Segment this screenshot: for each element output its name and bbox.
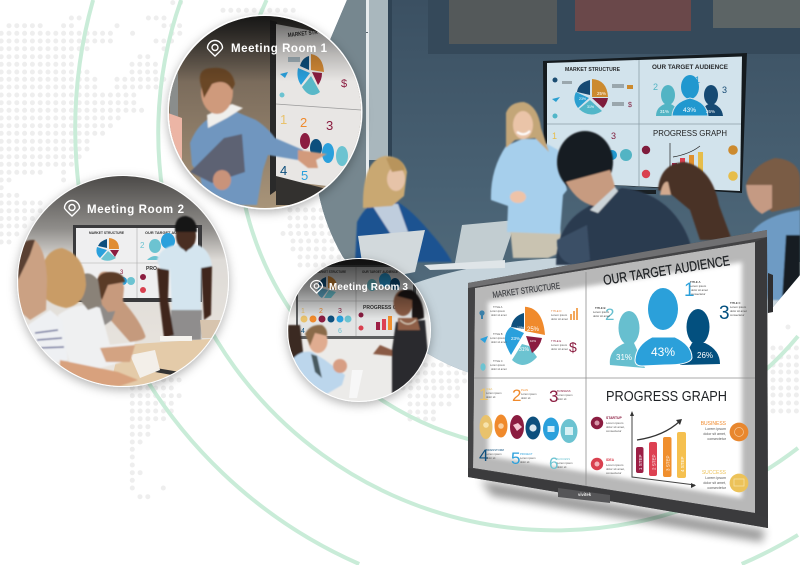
pie labels right: dolor sit amet [551,317,568,321]
pie labels left: dolor sit amet [491,340,507,344]
audience labels: dolor sit amet [691,288,708,292]
step text: SUCCESS [557,457,570,461]
display bezel [468,230,768,528]
pie labels left: dolor sit amet [491,367,507,371]
person center 43% [635,288,692,366]
pie chart [505,307,545,365]
label: meeting room 1 [208,41,328,56]
seated man with tie [288,325,347,395]
panel: target audience [593,252,747,368]
step numbers: 4 [479,446,488,465]
label: meeting room 2 [64,201,184,216]
step numbers: 5 [511,449,520,468]
step text: PROJECT [520,452,533,456]
audience labels: TITLE A [690,280,700,284]
bar chart with arrows [630,411,696,488]
startup and idea callouts: STARTUP [606,416,622,420]
pie labels right: TITLE D [551,309,561,313]
pictured screen: 1 [301,308,305,315]
pictured screen: MARKET STRUCTURE [89,231,124,235]
wall [318,0,800,375]
text: meeting room 1: Meeting Room 1 [231,43,328,55]
business and success callouts: BUSINESS [701,421,727,427]
wall display: progress graph [552,129,738,181]
audience labels: TITLE C [730,301,741,305]
circle 3 photo [288,259,430,401]
pictured screen: 6 [338,328,342,335]
pictured screen: 3 [120,270,124,276]
large foreground display [468,230,773,542]
startup and idea callouts [591,416,625,475]
person left 31%: 31% [616,353,632,362]
icon: location pin [310,280,322,293]
side port [768,273,773,313]
circle 3 frame [287,258,431,402]
business and success callouts: Lorem ipsum [705,427,726,431]
startup and idea callouts: IDEA [606,458,615,462]
circle 1 frame [168,14,362,210]
person right 26% [680,309,720,365]
pictured screen: 2 [319,308,323,315]
pie labels left: Lorem ipsum [490,309,505,313]
panel: six steps [479,385,578,473]
startup and idea callouts: dolor sit amet, [606,425,625,429]
bar chart with arrows: 1 STEP [638,454,643,470]
wall display: progress graph: PROGRESS GRAPH [653,129,727,138]
pie labels right [551,308,578,355]
wall display: progress graph: 1 [552,131,557,141]
display screen [473,242,755,513]
business and success callouts: dolor sit amet, [703,481,726,485]
pie chart: 31% [519,347,530,353]
circle: meeting room 2 [17,175,229,387]
label: meeting room 3 [310,280,409,293]
step text [486,387,573,469]
woman with brown hair from behind [658,162,732,240]
pie chart: 25% [527,327,540,333]
step text: dolor sit [557,465,567,469]
pictured screen: MARKET STR [288,30,319,39]
wall display: market structure: $ [628,102,632,109]
step numbers: 1 [479,385,488,404]
step numbers: 2 [512,386,521,405]
circle 2 frame [17,175,229,387]
icon: location pin [208,41,222,56]
step numbers [479,385,558,473]
pictured screen: PROGRESS G [363,305,397,311]
step text: Lorem ipsum [486,452,502,456]
bar chart with arrows: 2 STEP [652,454,656,470]
pie labels left: Lorem ipsum [490,336,505,340]
pictured screen: 4 [301,328,305,335]
wall display: target audience: 2 [653,82,658,92]
step text: Lorem ipsum [486,391,502,395]
pie labels right: dolor sit amet [551,347,568,351]
step numbers: 6 [549,454,558,473]
brand logo: vivitek [578,492,592,497]
startup and idea callouts: consectetur [606,471,622,475]
pie labels left: Lorem ipsum [490,363,505,367]
wall display: target audience: 31% [660,109,669,114]
business and success callouts: consectetur [707,437,727,441]
pictured screen: OUR TARGET AUDIENCE [362,270,399,274]
wall display: target audience: OUR TARGET AUDIENCE [652,64,729,71]
pictured screen: MARKET STRUCTURE [316,270,347,274]
pie labels right: Lorem ipsum [551,313,568,317]
laptop and desk items [349,370,363,398]
pictured screen: 2 [140,241,145,250]
person right 26%: 26% [697,351,713,360]
display shadow [480,480,765,542]
step text: Lorem ipsum [520,456,536,460]
wall display: target audience: 1 [695,75,700,85]
heading: our target audience: OUR TARGET AUDIENCE [602,252,731,288]
overhead windows [428,0,800,54]
person center 43%: 43% [651,345,675,359]
pie chart: 10% [530,339,536,343]
man pointing at screen [190,68,327,205]
step text: dolor sit [557,397,567,401]
pictured screen: 5 [301,168,308,183]
standing man [157,216,212,340]
step text: PLAN [521,388,528,392]
circle: meeting room 3 [287,258,431,402]
audience labels: consectetur [691,292,706,296]
pictured screen: 3 [326,118,333,133]
audience labels: Lorem ipsum [690,284,707,288]
wall display: progress graph: 3 [611,131,616,141]
laptop left [358,230,425,274]
pie labels right: TITLE E [551,339,561,343]
pie chart: 23% [511,336,520,341]
business and success callouts [701,421,748,492]
step text: Lorem ipsum [557,393,573,397]
seated woman left [355,156,452,262]
audience labels: TITLE B [595,306,606,310]
audience labels: 2 [605,305,614,324]
audience labels: Lorem ipsum [593,310,610,314]
panel: progress graph [591,388,748,492]
wall display: market structure: MARKET STRUCTURE [565,67,620,73]
step text: Lorem ipsum [557,461,573,465]
business and success callouts: consectetur [707,486,727,490]
business and success callouts: Lorem ipsum [705,476,726,480]
step icons [480,414,578,443]
bar chart with arrows: 4 STEP [680,456,685,472]
large conference room photo [318,0,800,375]
pie labels left: dolor sit amet [491,313,507,317]
step text: dolor sit [521,396,531,400]
step text: Lorem ipsum [521,392,537,396]
pictured screen: 1 [280,112,287,127]
business and success callouts: SUCCESS [702,470,727,476]
wall display: market structure [552,67,633,118]
wall display: market structure: 23% [579,97,586,101]
bar chart with arrows: 3 STEP [666,455,670,471]
step text: BRAINSTORM [486,448,505,452]
pie labels right: $ [569,339,577,355]
pie labels left: TITLE C [493,359,503,363]
man in dark suit from behind [556,131,695,265]
pictured screen: $ [341,78,347,90]
icon: location pin [64,201,80,216]
circle 1 photo [168,16,361,208]
step text: dolor sit [486,456,496,460]
pie labels left: TITLE B [493,332,503,336]
audience labels: dolor sit amet [593,314,610,318]
wall display: market structure: 31% [587,105,594,109]
circle 1 top shade [178,16,354,76]
circle 2 photo [18,176,228,386]
heading: market structure: MARKET STRUCTURE [492,281,561,300]
pictured screen: 3 [338,308,342,315]
table [410,258,800,375]
pictured screen: 2 [300,115,307,130]
wall display: market structure: 25% [597,91,606,96]
man on right [746,158,800,300]
audience labels: consectetur [730,313,745,317]
person left 31% [610,311,645,368]
pictured screen [296,259,416,339]
left side wall and window column [318,0,392,260]
text: meeting room 2: Meeting Room 2 [87,204,184,216]
audience labels: dolor sit amet [730,309,747,313]
pie labels left [479,305,507,371]
pictured screen: OUR TARGET AU [145,231,177,235]
circle 3 top shade [290,259,428,316]
wall display [543,53,747,194]
audience labels [593,280,747,324]
circle: meeting room 1 [168,14,362,210]
heading: progress graph: PROGRESS GRAPH [606,388,727,405]
startup and idea callouts: dolor sit amet, [606,467,625,471]
table and laptop [110,320,225,386]
pie labels left: TITLE A [493,305,503,309]
wall display: target audience: 43% [683,107,696,114]
panel: market structure [479,281,578,371]
wall display: target audience [652,64,729,116]
wall display: target audience: 26% [706,109,715,114]
laptop center [424,220,516,270]
pictured screen [270,20,361,205]
standing woman [373,290,428,400]
presenter [491,102,567,258]
audience labels: Lorem ipsum [730,305,747,309]
audience labels: 1 [684,280,695,301]
startup and idea callouts: consectetur [606,429,622,433]
step text: dolor sit [486,395,496,399]
wall display: target audience: 3 [722,85,727,95]
startup and idea callouts: Lorem ipsum [606,463,624,467]
pie chart: 10% [517,326,524,330]
pictured screen: 4 [280,163,287,178]
seated people [18,240,145,386]
text: meeting room 3: Meeting Room 3 [329,282,409,293]
audience labels: 3 [719,303,730,324]
pictured screen: PRO [146,266,157,272]
startup and idea callouts: Lorem ipsum [606,421,624,425]
business and success callouts: dolor sit amet, [703,432,726,436]
step text: IDEA [486,387,492,391]
step text: BUSINESS [557,389,571,393]
pictured screen [73,225,202,302]
step numbers: 3 [549,387,558,406]
pie labels right: Lorem ipsum [551,343,568,347]
step text: dolor sit [520,460,530,464]
